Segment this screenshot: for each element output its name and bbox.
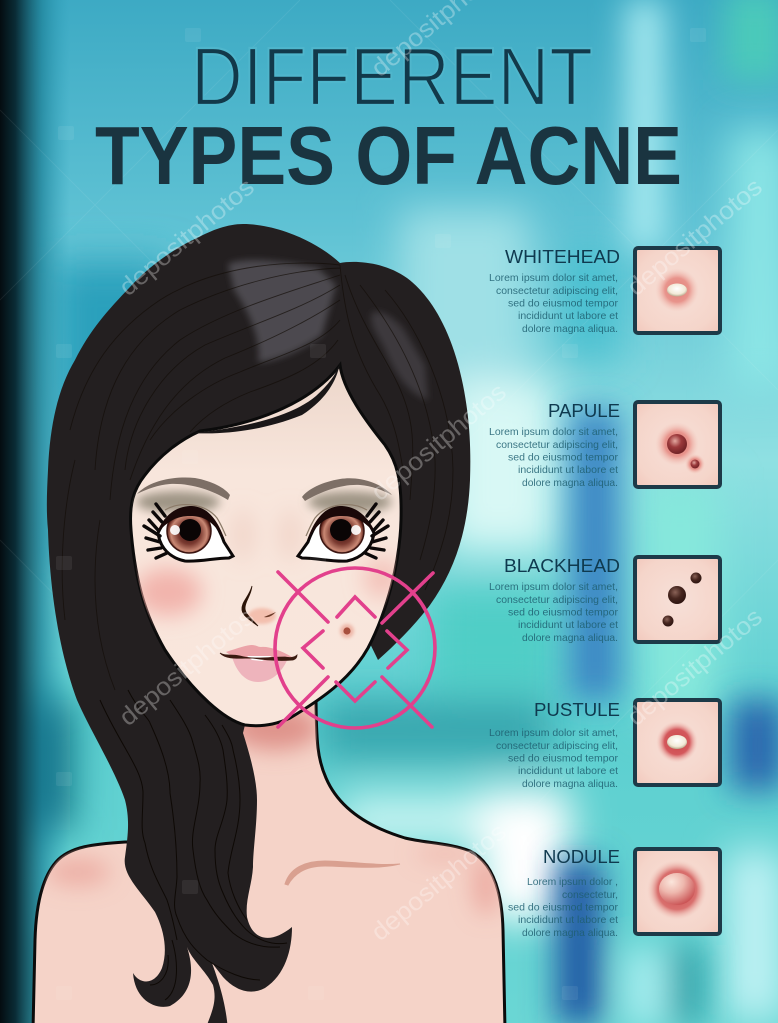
item: whitehead: sed do eiusmod tempor bbox=[508, 298, 619, 310]
nose bbox=[242, 586, 276, 626]
forelock bbox=[193, 363, 340, 433]
item: papule bbox=[489, 401, 720, 489]
item: pustule: consectetur adipiscing elit, bbox=[496, 741, 618, 752]
item: blackhead: consectetur adipiscing elit, bbox=[496, 595, 618, 606]
item: papule: sed do eiusmod tempor bbox=[508, 452, 619, 464]
item: blackhead: Lorem ipsum dolor sit amet, bbox=[489, 582, 618, 593]
neck and shoulders bbox=[33, 690, 505, 1023]
item: nodule: dolore magna aliqua. bbox=[522, 928, 618, 939]
item: whitehead: incididunt ut labore et bbox=[518, 311, 618, 322]
item: pustule: sed do eiusmod tempor bbox=[508, 754, 619, 764]
left eye bbox=[144, 504, 233, 561]
lips bbox=[220, 645, 297, 682]
item: papule: Lorem ipsum dolor sit amet, bbox=[489, 427, 618, 438]
right eye bbox=[298, 504, 388, 561]
item: pustule: dolore magna aliqua. bbox=[522, 779, 618, 790]
item: pustule bbox=[489, 700, 720, 790]
title: DIFFERENT bbox=[191, 30, 593, 123]
item: nodule: Lorem ipsum dolor , bbox=[527, 877, 618, 888]
item: pustule: PUSTULE bbox=[534, 700, 620, 720]
watermarks: depositphotos bbox=[622, 173, 768, 302]
hair strands bbox=[62, 263, 453, 1000]
item: nodule bbox=[508, 847, 720, 939]
watermarks: depositphotos bbox=[114, 173, 260, 302]
item: blackhead: BLACKHEAD bbox=[504, 556, 620, 576]
watermarks bbox=[114, 0, 768, 947]
item: whitehead: consectetur adipiscing elit, bbox=[496, 286, 618, 297]
face bbox=[131, 365, 401, 726]
eyebrows bbox=[137, 478, 392, 501]
item: nodule: NODULE bbox=[543, 847, 620, 867]
neck and shoulder shading bbox=[46, 706, 500, 915]
item: papule: incididunt ut labore et bbox=[518, 465, 618, 476]
item: whitehead bbox=[489, 247, 720, 335]
item: papule: dolore magna aliqua. bbox=[522, 478, 618, 489]
item: whitehead: Lorem ipsum dolor sit amet, bbox=[489, 273, 618, 284]
collarbone bbox=[285, 861, 400, 885]
woman illustration bbox=[33, 224, 505, 1023]
item: blackhead: incididunt ut labore et bbox=[518, 620, 618, 631]
item: pustule: incididunt ut labore et bbox=[518, 766, 618, 777]
blush and eyeshadow bbox=[134, 491, 400, 616]
item: whitehead: WHITEHEAD bbox=[505, 247, 620, 267]
hair back and side bbox=[47, 224, 470, 1023]
watermarks: depositphotos bbox=[366, 818, 512, 947]
item: papule: consectetur adipiscing elit, bbox=[496, 440, 618, 451]
item: blackhead: sed do eiusmod tempor bbox=[508, 608, 619, 618]
title bbox=[95, 30, 682, 202]
item: blackhead: dolore magna aliqua. bbox=[522, 633, 618, 644]
item: nodule: incididunt ut labore et bbox=[518, 915, 618, 926]
watermarks: depositphotos bbox=[366, 378, 512, 507]
item: blackhead bbox=[489, 556, 720, 644]
item: whitehead: dolore magna aliqua. bbox=[522, 324, 618, 335]
watermarks: depositphotos bbox=[114, 603, 260, 732]
title: TYPES OF ACNE bbox=[95, 109, 682, 202]
hair highlights bbox=[228, 260, 428, 400]
watermarks: depositphotos bbox=[622, 603, 768, 732]
acne spot on cheek bbox=[340, 624, 354, 638]
item: nodule: consectetur, bbox=[562, 890, 618, 901]
item: papule: PAPULE bbox=[548, 401, 620, 421]
camera watermark icons bbox=[56, 28, 706, 1000]
item: nodule: sed do eiusmod tempor bbox=[508, 902, 619, 914]
item: pustule: Lorem ipsum dolor sit amet, bbox=[489, 728, 618, 739]
target reticle bbox=[275, 568, 435, 728]
